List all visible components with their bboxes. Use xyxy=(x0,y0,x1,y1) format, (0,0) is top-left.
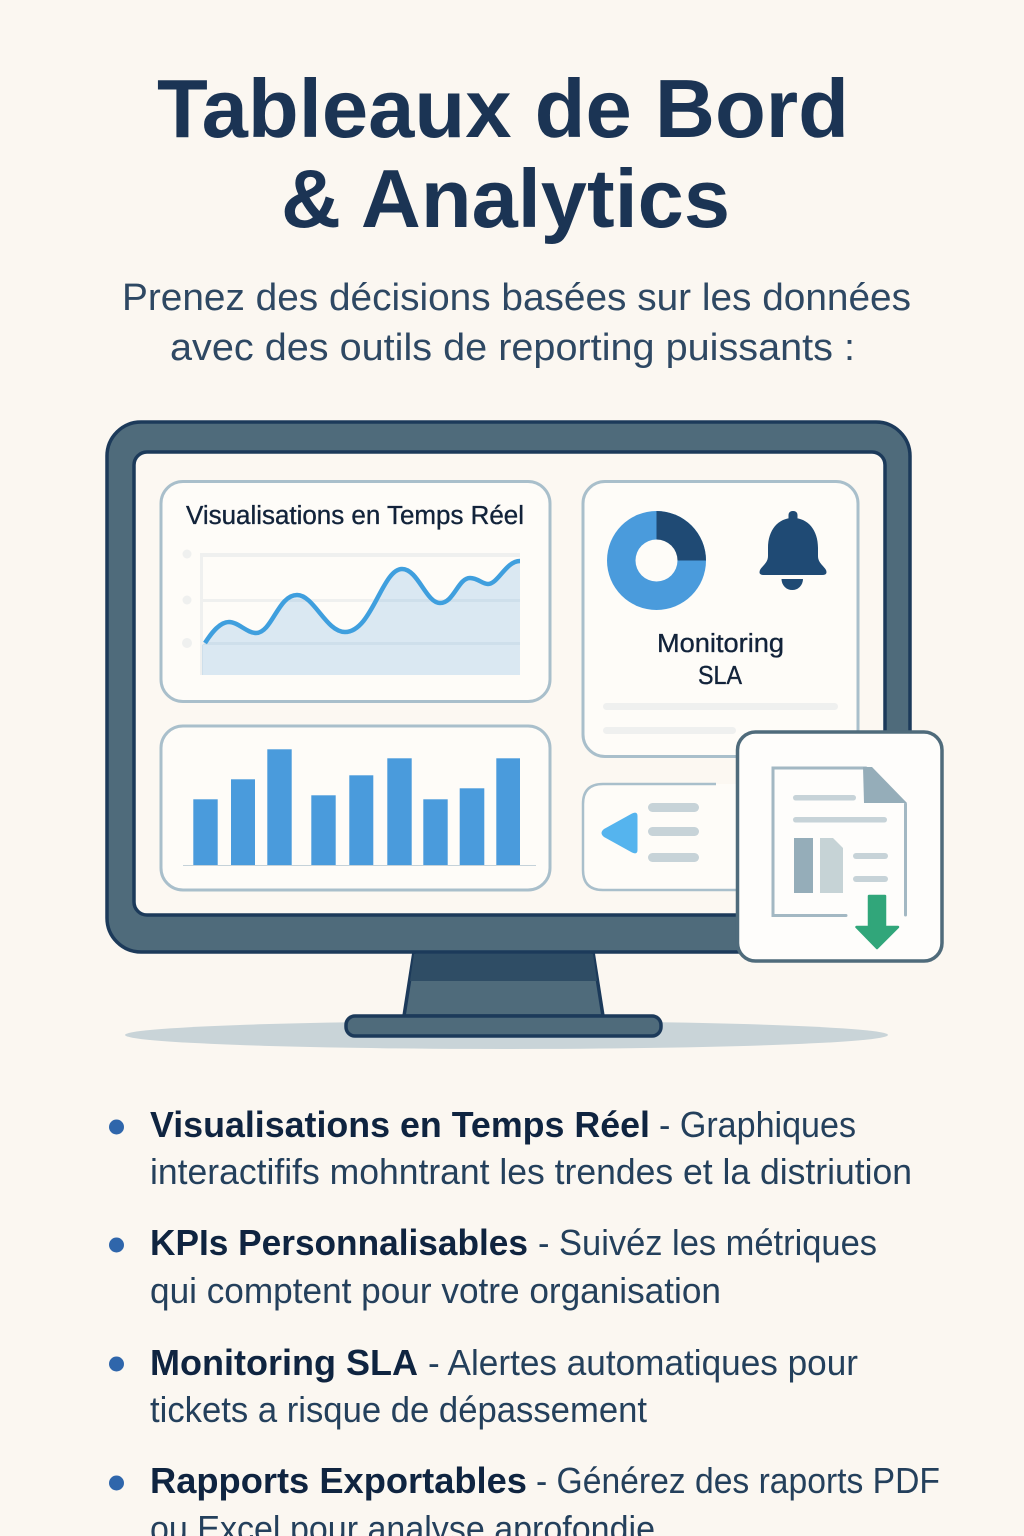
bullet: real-time visualisations: Visualisations en Temps Réel xyxy=(150,1104,650,1145)
bullet: exportable reports: - Générez des raports PDF xyxy=(536,1460,940,1501)
panel: real-time line chart xyxy=(161,482,550,702)
panel label xyxy=(657,630,784,690)
icon: bell xyxy=(760,511,826,590)
card: export report xyxy=(738,732,942,961)
bullet: custom KPIs: qui comptent pour votre organisation xyxy=(150,1270,721,1311)
illustration: dashboard monitor xyxy=(107,422,942,1049)
panel label: Monitoring xyxy=(657,630,784,658)
bullet: SLA monitoring: - Alertes automatiques pour xyxy=(428,1342,858,1383)
panel heading: Visualisations en Temps Réel xyxy=(186,502,524,530)
title xyxy=(157,62,849,245)
monitor stand xyxy=(346,952,661,1036)
bullet: real-time visualisations: - Graphiques xyxy=(659,1104,856,1145)
bullet: real-time visualisations: interactififs mohntrant les trendes et la distriution xyxy=(150,1151,912,1192)
bullet: custom KPIs xyxy=(109,1222,877,1311)
bullet: SLA monitoring: Monitoring SLA xyxy=(150,1342,418,1383)
subtitle: avec des outils de reporting puissants : xyxy=(170,327,855,369)
subtitle xyxy=(122,277,911,369)
subtitle: Prenez des décisions basées sur les données xyxy=(122,277,911,319)
monitor screen xyxy=(134,452,885,915)
bullet: custom KPIs: - Suivéz les métriques xyxy=(538,1222,877,1263)
bullet: SLA monitoring: tickets a risque de dépassement xyxy=(150,1389,647,1430)
bullet: custom KPIs: KPIs Personnalisables xyxy=(150,1222,528,1263)
monitor shadow xyxy=(125,1021,888,1049)
monitor frame xyxy=(107,422,910,952)
panel: list with arrow xyxy=(583,784,745,890)
bars xyxy=(193,749,520,865)
panel label: SLA xyxy=(698,662,742,690)
title: & Analytics xyxy=(281,152,730,245)
icon: download arrow xyxy=(856,896,898,948)
title: Tableaux de Bord xyxy=(157,62,849,155)
panel: bar chart xyxy=(161,726,550,890)
bullet: real-time visualisations xyxy=(109,1104,912,1192)
bullet: SLA monitoring xyxy=(109,1342,858,1430)
area line chart xyxy=(182,550,520,675)
donut chart xyxy=(607,511,706,610)
panel: SLA monitoring xyxy=(583,482,858,756)
bullet: exportable reports: Rapports Exportables xyxy=(150,1460,527,1501)
icon: left triangle xyxy=(602,813,638,853)
bullet: exportable reports xyxy=(109,1460,940,1536)
icon: document xyxy=(773,767,907,916)
